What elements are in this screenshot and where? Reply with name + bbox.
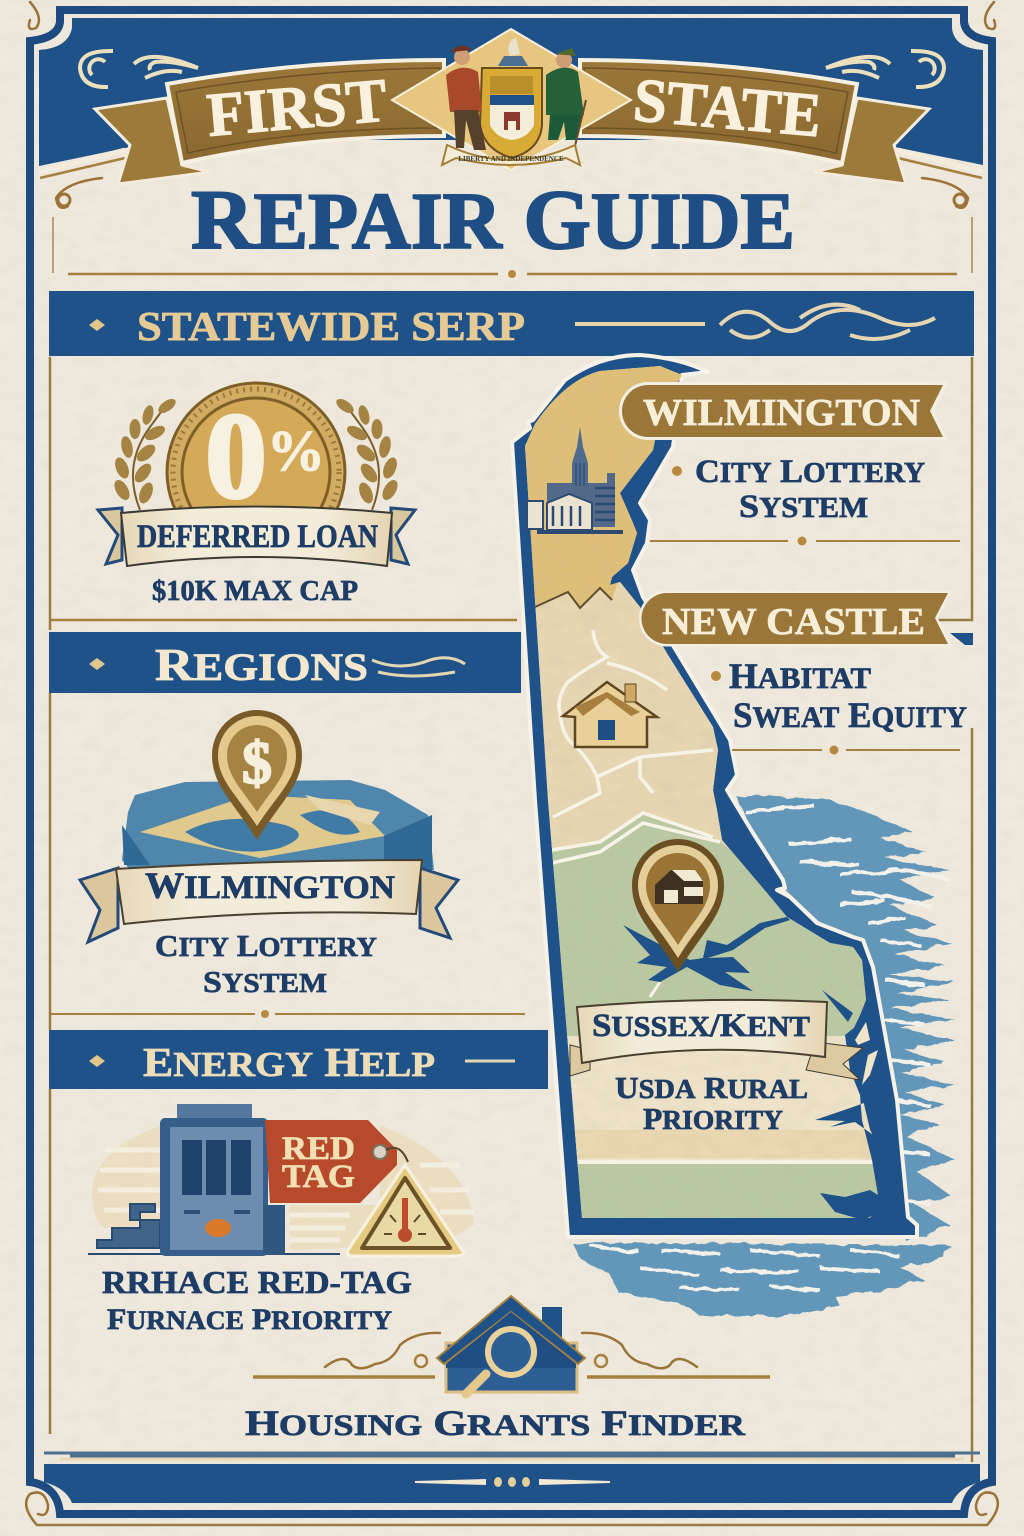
land: mid county, tan	[530, 575, 740, 860]
red tag	[265, 1120, 408, 1203]
laurel left	[111, 396, 178, 510]
New Castle bullet and text	[711, 656, 967, 735]
Sussex/Kent detail text: USDA RURAL	[615, 1070, 808, 1105]
state outline	[512, 355, 917, 1237]
section bar: Energy Help	[49, 1030, 548, 1089]
title ribbon: First State	[95, 29, 929, 184]
emblem flourishes	[253, 1375, 770, 1379]
section bar: Regions: REGIONS	[155, 639, 368, 690]
right ribbon band	[580, 60, 857, 163]
rubble steps	[88, 1204, 340, 1254]
footer banner	[44, 1453, 980, 1503]
seal motto scroll: LIBERTY AND INDEPENDENCE	[458, 155, 564, 163]
energy help text: RRHACE RED-TAG	[102, 1264, 412, 1300]
left ribbon band	[167, 60, 444, 163]
energy help text: FURNACE PRIORITY	[107, 1303, 392, 1336]
section bar: Energy Help: ENERGY HELP	[143, 1039, 435, 1085]
Wilmington banner	[80, 860, 458, 942]
word: First: FIRST	[204, 67, 390, 150]
barn pin	[632, 839, 724, 972]
New Castle bullet and text: HABITAT	[729, 656, 871, 696]
callout: New Castle	[642, 593, 967, 754]
Wilmington bullet and text: SYSTEM	[739, 489, 868, 525]
warning triangle	[348, 1165, 464, 1256]
section bar: Regions	[49, 632, 521, 693]
seal diamond	[392, 29, 631, 170]
magnifier	[466, 1374, 486, 1394]
seal motto scroll	[442, 145, 580, 165]
callout: New Castle: NEW CASTLE	[662, 601, 925, 643]
section bar: Statewide SERP	[49, 291, 974, 356]
Wilmington bullet and text	[672, 454, 925, 525]
loan cap text: $10K MAX CAP	[152, 576, 358, 607]
Wilmington skyline	[527, 427, 623, 532]
Sussex/Kent detail text	[615, 1070, 808, 1136]
right border rules	[50, 357, 973, 1462]
left ribbon tail	[95, 98, 210, 184]
Sussex/Kent detail text: PRIORITY	[643, 1101, 783, 1136]
house icon	[563, 682, 657, 747]
dollar pin	[212, 710, 302, 840]
furnace	[160, 1104, 285, 1256]
panel: energy help	[88, 1104, 474, 1336]
callout: Wilmington	[622, 385, 960, 546]
Wilmington detail text: SYSTEM	[203, 964, 327, 999]
header blue panel	[39, 18, 983, 208]
word: State: STATE	[631, 66, 824, 150]
footer emblem: house and magnifier	[253, 1296, 770, 1394]
farmer figure	[446, 45, 486, 150]
red tag: TAG	[282, 1159, 355, 1195]
Wilmington bullet and text: CITY LOTTERY	[695, 454, 925, 490]
laurel right	[334, 396, 401, 510]
county boundary lines	[535, 588, 612, 608]
gold coin: %	[267, 418, 325, 483]
New Castle bullet and text: SWEAT EQUITY	[733, 695, 967, 735]
Wilmington banner: WILMINGTON	[145, 866, 395, 907]
land: north county, gold	[525, 366, 682, 607]
callout: Wilmington: WILMINGTON	[643, 392, 920, 434]
land: southern tip, green	[578, 1164, 878, 1218]
mini map platform	[122, 780, 434, 870]
panel: Wilmington region	[49, 710, 525, 1018]
inland bay and coast inlets	[623, 917, 893, 1220]
Wilmington detail text: CITY LOTTERY	[155, 928, 377, 963]
Wilmington detail text	[155, 928, 377, 999]
land: central, green	[552, 815, 866, 1036]
land: south, cream and tan	[567, 1036, 872, 1160]
shield	[480, 38, 542, 158]
callout: Sussex/Kent	[570, 1000, 863, 1136]
red tag: RED	[282, 1131, 355, 1167]
gold coin	[166, 382, 346, 508]
map of Delaware	[500, 340, 920, 1240]
dollar pin: $	[242, 730, 272, 796]
deferred loan banner: DEFERRED LOAN	[137, 519, 378, 555]
energy help text	[102, 1264, 412, 1336]
callout: Sussex/Kent: SUSSEX/KENT	[592, 1008, 810, 1044]
panel: deferred loan	[49, 383, 517, 620]
deferred loan banner	[98, 506, 415, 566]
backdrop sweep	[92, 1125, 474, 1250]
water: south sea	[572, 1243, 950, 1316]
section bar: Statewide SERP: STATEWIDE SERP	[137, 303, 525, 349]
gold coin: 0	[206, 389, 266, 524]
title rule	[53, 217, 972, 278]
house	[446, 1343, 577, 1392]
land regions	[525, 366, 878, 1218]
water: east bay	[735, 795, 955, 1240]
militiaman figure	[546, 48, 586, 150]
right ribbon tail	[814, 98, 929, 184]
title: Repair Guide: REPAIR GUIDE	[191, 173, 795, 267]
state seal	[392, 29, 631, 170]
footer title: HOUSING GRANTS FINDER	[245, 1403, 745, 1443]
